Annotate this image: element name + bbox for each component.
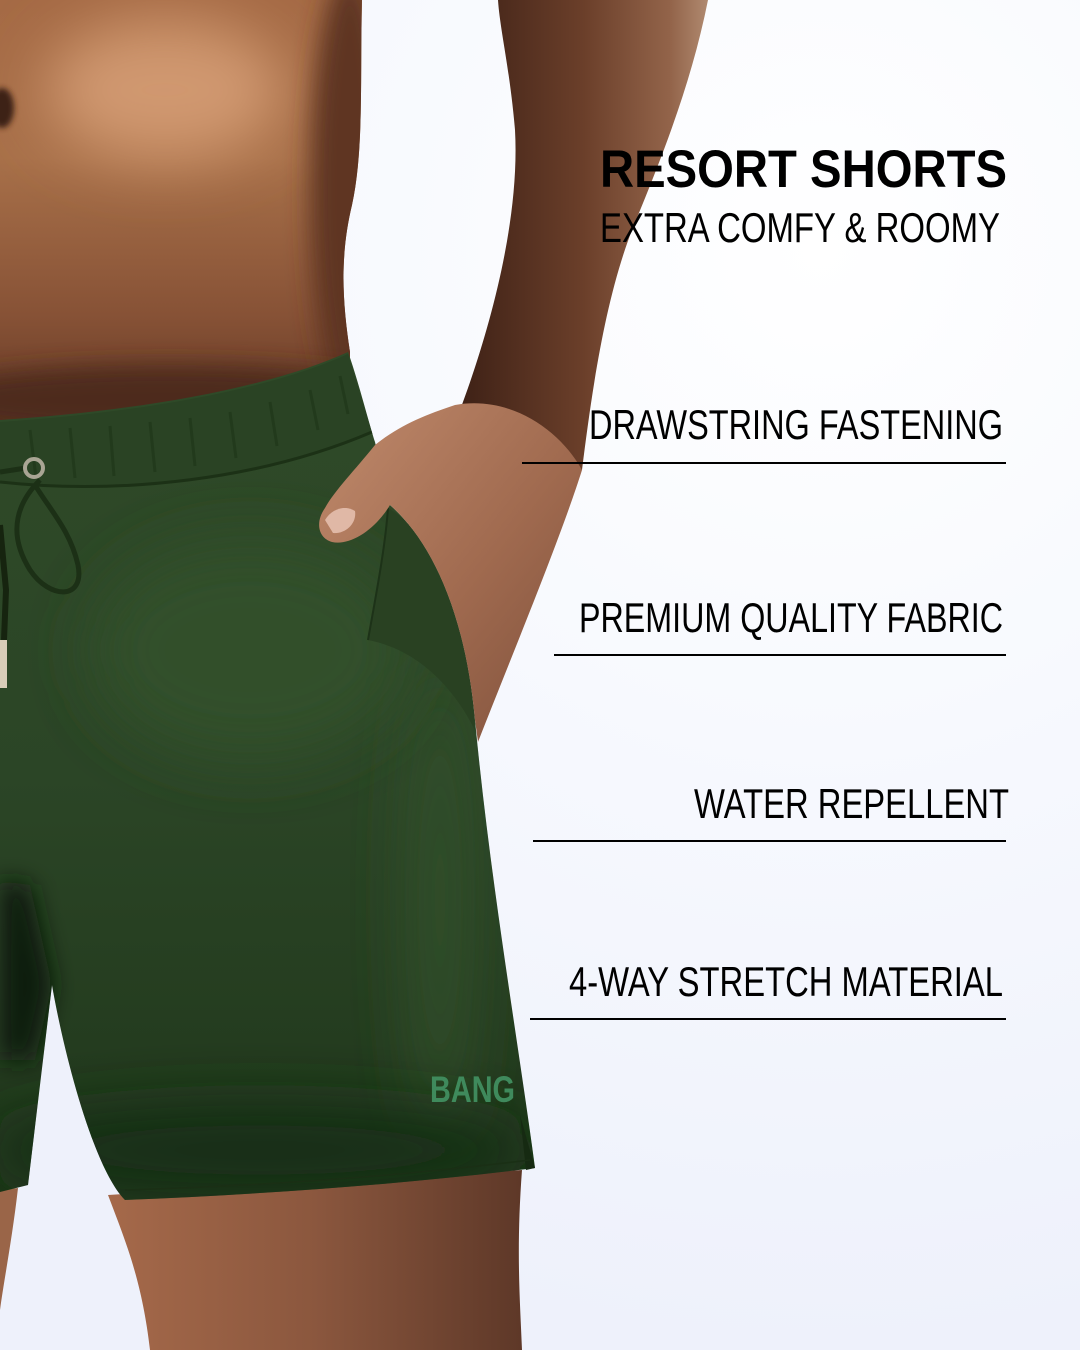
photo: left leg [0,1188,18,1310]
photo: right arm [460,0,708,470]
photo: torso [0,0,362,420]
photo: hand in pocket [319,403,582,742]
title: RESORT SHORTS [600,140,1007,199]
photo: green shorts [0,352,540,1200]
shorts logo: BANG [430,1069,515,1110]
photo: right leg [108,1170,522,1350]
